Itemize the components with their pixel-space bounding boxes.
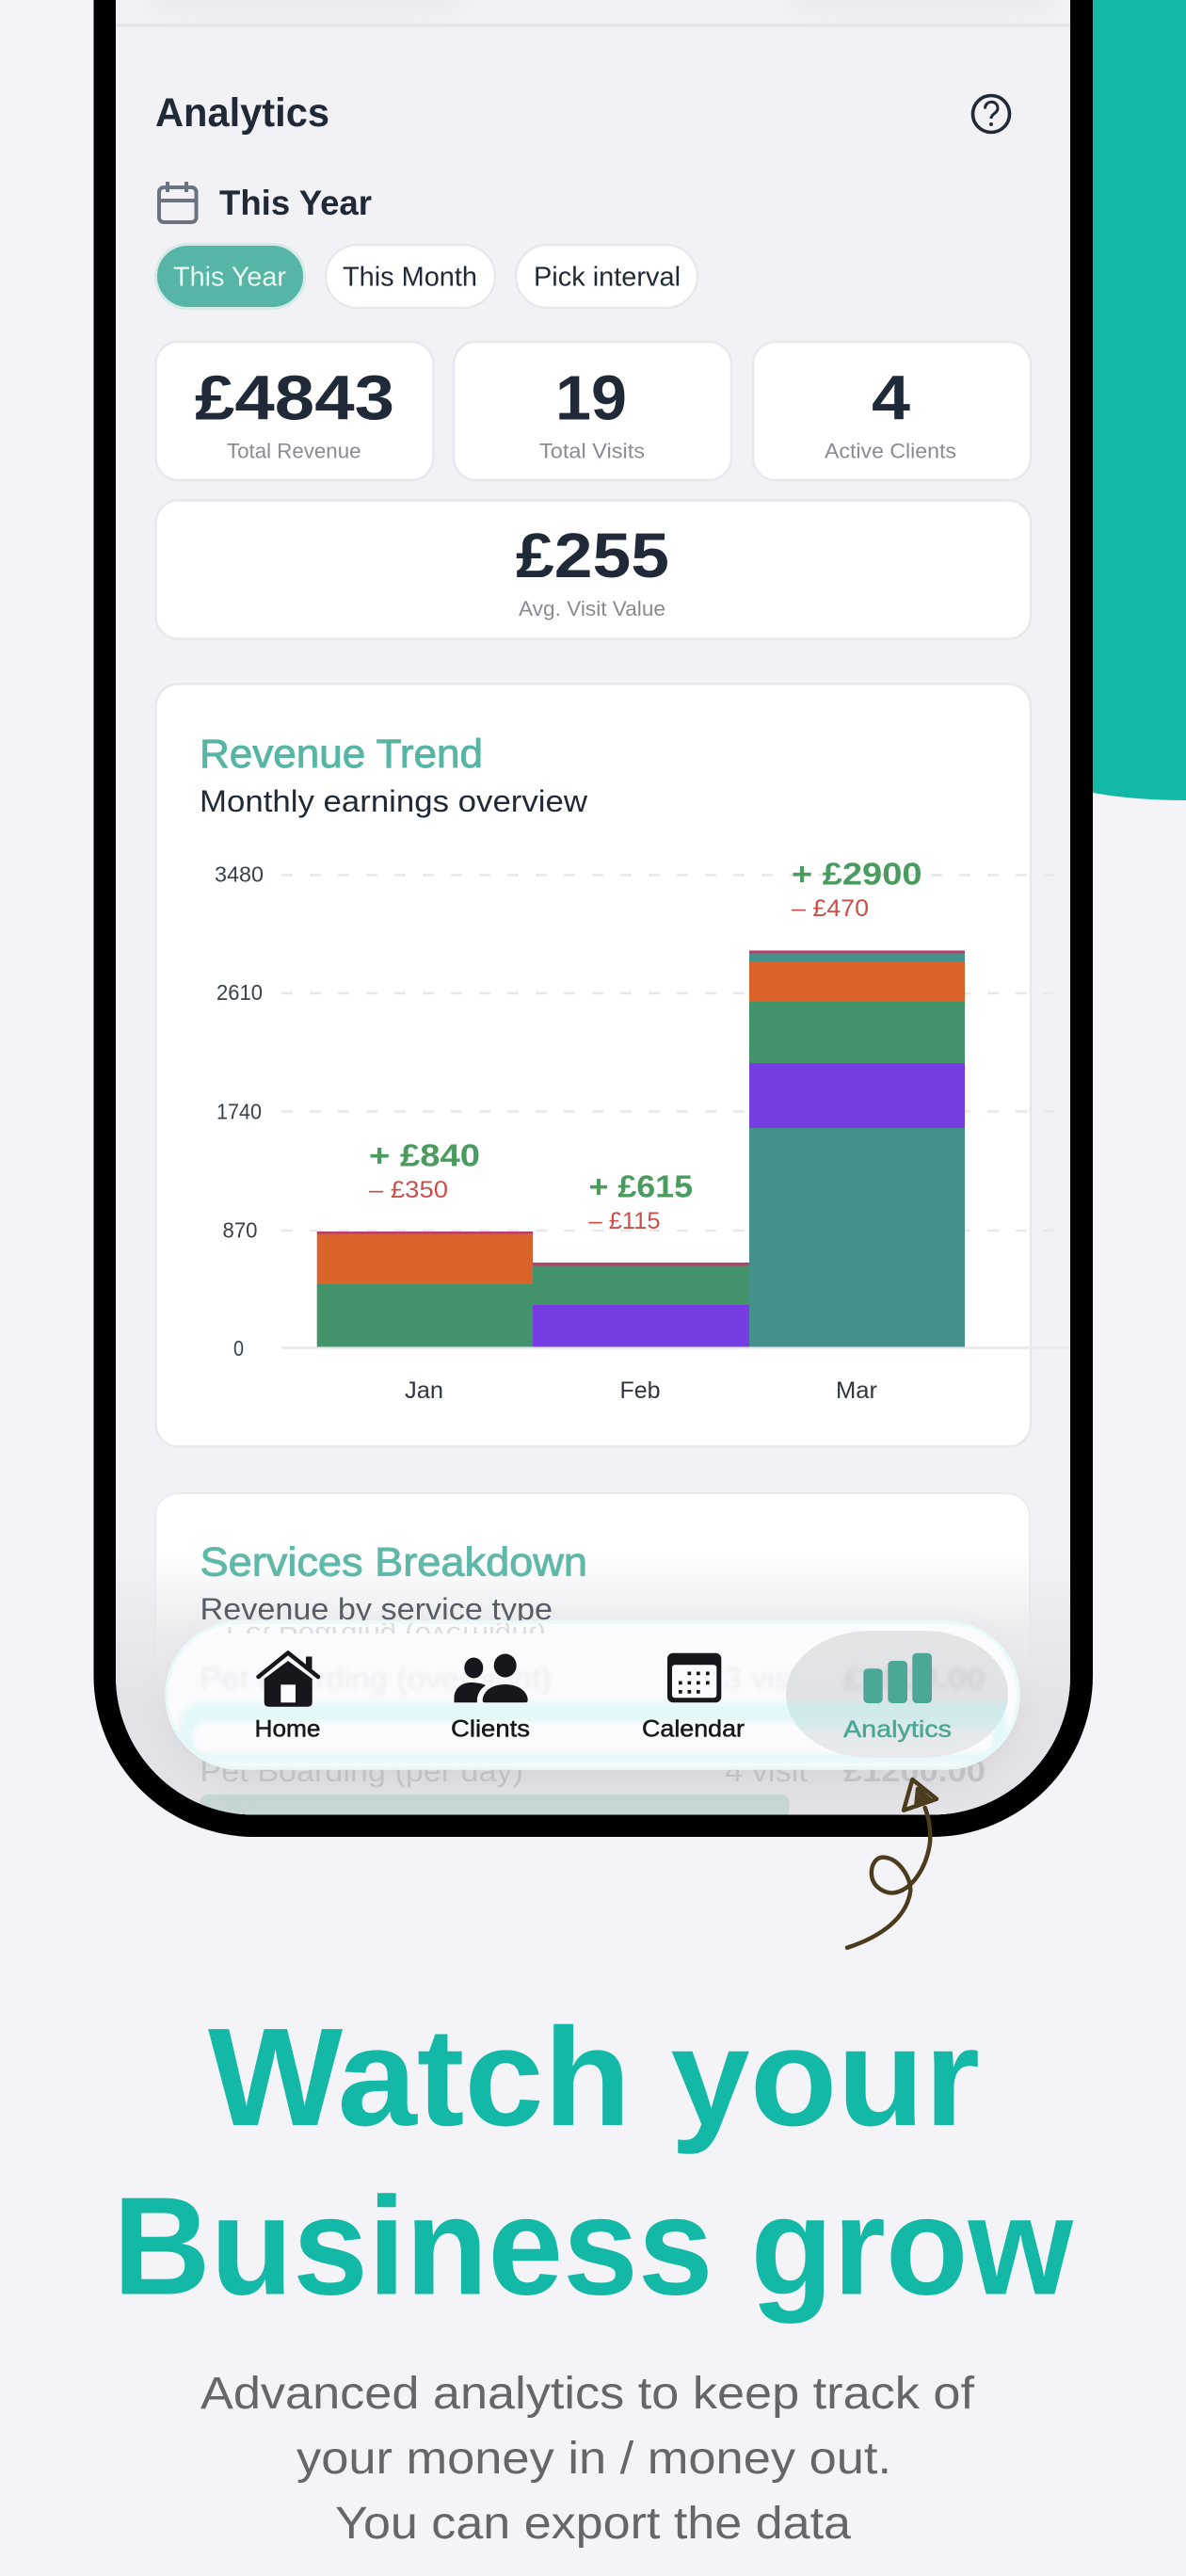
bar: Mar: [749, 951, 965, 1346]
Jan values: [369, 1144, 478, 1198]
stat card: total visits: Total Visits: [539, 439, 645, 463]
description: You can export the data: [335, 2499, 851, 2549]
stat card: average visit value: [156, 501, 1031, 638]
y axis labels: 870: [222, 1218, 258, 1243]
period chips: [156, 245, 697, 309]
service row: per day: Pet Boarding (per day): [200, 1754, 523, 1788]
y axis labels: 1740: [216, 1100, 262, 1124]
Feb values: – £115: [589, 1208, 661, 1234]
navigation bar: £1800.00: [843, 1662, 986, 1696]
icon: clients: [454, 1653, 528, 1702]
x axis labels: Mar: [836, 1377, 877, 1404]
stat card: total revenue: Total Revenue: [227, 439, 361, 463]
stat card: average visit value: £255: [516, 521, 669, 591]
description: your money in / money out.: [296, 2434, 891, 2484]
stat card: total visits: [454, 342, 731, 480]
panel: services breakdown: [116, 1494, 1070, 1815]
tab label: Home: Home: [254, 1715, 320, 1742]
stat card: active clients: 4: [872, 363, 910, 433]
y axis labels: 2610: [216, 980, 263, 1005]
stat card: active clients: Active Clients: [825, 439, 956, 463]
tab label: Clients: Clients: [451, 1715, 530, 1742]
Jan values: – £350: [369, 1177, 448, 1203]
stat card: total revenue: [156, 342, 433, 480]
stat card: active clients: [753, 342, 1031, 480]
panel: revenue trend: [156, 684, 1070, 1446]
revenue trend subtitle: Monthly earnings overview: [200, 784, 588, 818]
revenue trend title: Revenue Trend: [200, 732, 483, 777]
headline: Business grow: [113, 2169, 1074, 2324]
Feb values: [589, 1175, 693, 1229]
description: [200, 2369, 975, 2549]
services breakdown subtitle: Revenue by service type: [200, 1592, 553, 1626]
Jan values: + £840: [369, 1137, 480, 1173]
Feb values: + £615: [589, 1169, 693, 1203]
Mar values: [792, 862, 921, 916]
navigation bar: Pet Boarding (overnight): [200, 1662, 552, 1696]
icon: calendar tab: [667, 1653, 721, 1702]
headline: Watch your: [208, 2000, 980, 2155]
navigation bar: Pet Boarding (overnight): [226, 1621, 546, 1650]
Mar values: + £2900: [792, 857, 922, 891]
header: Analytics: Analytics: [155, 90, 329, 136]
service row: per day: 4 visit: [725, 1754, 808, 1788]
icon: analytics tab: [863, 1653, 932, 1703]
period chips: This Year: [173, 262, 286, 292]
x axis labels: [405, 1381, 877, 1398]
service progress bar: [200, 1795, 789, 1815]
teal corner shape: [1093, 0, 1186, 800]
period heading: This Year: [219, 184, 372, 222]
Mar values: – £470: [792, 895, 869, 922]
service row: per day: £1200.00: [843, 1754, 986, 1788]
stat card: average visit value: Avg. Visit Value: [519, 597, 665, 620]
active tab highlight: [786, 1631, 1008, 1758]
stat card: total visits: 19: [555, 363, 627, 433]
bar: Jan: [317, 1232, 533, 1346]
bar: Feb: [533, 1263, 749, 1346]
x axis labels: Feb: [619, 1377, 661, 1404]
period chips: This Month: [343, 262, 477, 292]
tab label: Calendar: Calendar: [642, 1715, 745, 1742]
stat card: total revenue: £4843: [195, 363, 394, 433]
tab label: Analytics: Analytics: [843, 1716, 952, 1743]
period chips: Pick interval: [534, 262, 681, 292]
phone frame: [94, 0, 1093, 1837]
y axis labels: 3480: [215, 862, 264, 887]
icon: calendar: [159, 182, 196, 222]
y axis labels: [215, 862, 264, 1360]
services breakdown title: Services Breakdown: [200, 1540, 587, 1586]
icon: home: [258, 1653, 318, 1707]
icon: help: [973, 96, 1009, 132]
x axis labels: Jan: [405, 1377, 443, 1404]
service row: per day: [202, 1761, 985, 1787]
y axis labels: 0: [233, 1336, 244, 1360]
description: Advanced analytics to keep track of: [200, 2369, 975, 2419]
arrow pointing to analytics tab: [847, 1779, 937, 1948]
phone screen: [116, 0, 1070, 1870]
navigation bar: [167, 1621, 1018, 1778]
headline: [113, 2000, 1074, 2324]
navigation bar: 3 visit: [723, 1662, 808, 1696]
